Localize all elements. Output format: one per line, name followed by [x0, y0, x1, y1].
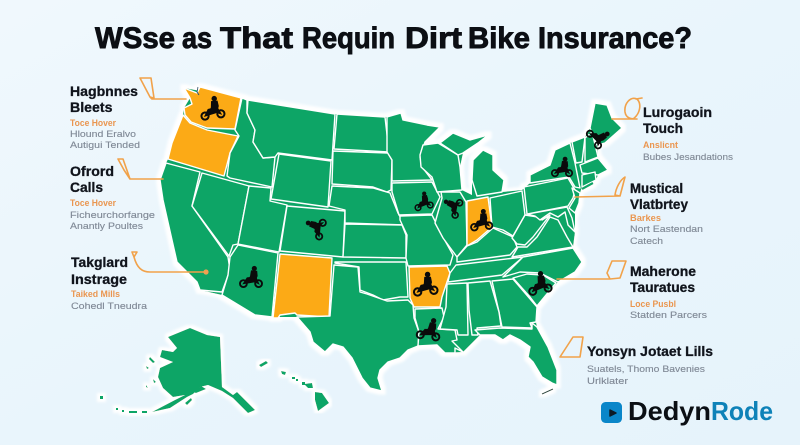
- state: Michigan upper: [440, 133, 488, 155]
- subheading: Loce Pusbl: [630, 299, 676, 309]
- title: That: [220, 22, 293, 55]
- state: New York: [530, 143, 580, 188]
- body: Bubes Jesandations: [643, 152, 733, 163]
- arrow: Lurogaoin connector: [612, 98, 642, 119]
- arrow: Hagbnnes connector: [140, 78, 186, 99]
- state: Texas: [297, 265, 419, 391]
- subheading: Barkes: [630, 213, 661, 223]
- icon: bike New York: [552, 157, 572, 176]
- heading: Ofrord: [70, 163, 114, 179]
- state: Long Island: [582, 183, 593, 189]
- body: Nort Eastendan: [630, 224, 703, 235]
- state: Florida: [475, 323, 557, 385]
- body: Suatels, Thomo Bavenies: [587, 364, 705, 375]
- state: Maine: [590, 103, 622, 145]
- state: South Carolina: [513, 274, 556, 306]
- map: Alaska: [100, 328, 255, 413]
- heading: Touch: [643, 120, 683, 136]
- state: Kansas: [343, 224, 406, 258]
- state: Washington: [184, 87, 241, 129]
- callout: Mustical Vlatbrtey: [630, 180, 703, 247]
- body: Cohedl Tneudra: [71, 301, 148, 312]
- land silhouette: [160, 88, 622, 391]
- Puget Sound: [197, 87, 199, 95]
- body: Ficheurchorfange: [70, 210, 155, 221]
- heading: Bleets: [70, 99, 113, 115]
- state: Wyoming: [271, 154, 331, 207]
- state: Oregon: [168, 115, 238, 176]
- heading: Tauratues: [630, 279, 695, 295]
- state: Utah: [238, 186, 287, 252]
- marker: Takglard dot: [203, 269, 209, 275]
- state: Maryland and Delaware: [527, 207, 575, 232]
- state: Missouri: [400, 215, 453, 266]
- title: [95, 22, 692, 55]
- heading: Maherone: [630, 263, 696, 279]
- heading: Takglard: [71, 254, 128, 270]
- arrow: Takglard connector: [132, 252, 206, 272]
- state: Ohio: [490, 191, 525, 236]
- state: Idaho: [227, 98, 275, 187]
- state: Michigan lower: [472, 150, 504, 196]
- icon: bike Illinois: [440, 195, 463, 219]
- state: California: [160, 163, 230, 292]
- state: Oklahoma: [335, 262, 408, 300]
- state: South Dakota: [332, 151, 392, 192]
- heading: Yonsyn Jotaet Lills: [587, 343, 713, 359]
- arrow: Yonsyn connector: [560, 337, 583, 357]
- callout: Lurogaoin Touch: [643, 104, 733, 163]
- state: Wisconsin: [420, 143, 462, 192]
- arrow: Ofrord connector: [118, 159, 163, 179]
- title: Insurance?: [538, 22, 692, 55]
- state: Iowa: [392, 182, 440, 215]
- title: as: [182, 22, 212, 55]
- state: Tennessee: [448, 257, 523, 282]
- body: Autigui Tended: [70, 140, 140, 151]
- heading: Hagbnnes: [70, 83, 138, 99]
- subheading: Taiked Mills: [71, 289, 120, 299]
- state: Florida Keys: [542, 389, 553, 394]
- logo wordmark: Dedyn: [628, 396, 711, 426]
- heading: Vlatbrtey: [630, 196, 688, 212]
- state: Mississippi: [440, 283, 468, 335]
- logo icon: [601, 402, 622, 423]
- callout: Maherone Tauratues: [630, 263, 707, 321]
- state: North Dakota: [334, 114, 389, 152]
- icon: bike Indiana: [469, 208, 493, 231]
- state: Colorado: [280, 206, 345, 257]
- state: Pennsylvania: [524, 178, 575, 214]
- callout: Yonsyn Jotaet Lills: [587, 343, 713, 387]
- body: Hlound Eralvo: [70, 129, 136, 140]
- state: Alabama: [468, 281, 501, 335]
- map: Hawaii: [259, 361, 329, 411]
- heading: Calls: [70, 179, 103, 195]
- title: Requin: [302, 22, 395, 55]
- icon: bike Arizona: [240, 266, 262, 287]
- subheading: Anslicnt: [643, 140, 678, 150]
- arrow: Mustical connector: [575, 177, 625, 197]
- body: Anantly Poultes: [70, 221, 143, 232]
- state: West Virginia: [512, 215, 550, 245]
- heading: Lurogaoin: [643, 104, 712, 120]
- icon: bike Maine: [586, 122, 613, 150]
- subheading: Toce Hover: [70, 198, 116, 208]
- icon: bike Louisiana: [416, 316, 442, 341]
- state: Kentucky: [457, 228, 517, 262]
- Alaska mainland: [152, 328, 255, 413]
- state: New Hampshire: [585, 132, 598, 162]
- state: Indiana: [467, 197, 492, 246]
- title: Bike: [468, 22, 530, 55]
- map: contiguous United States: [160, 87, 622, 394]
- body: Statden Parcers: [630, 310, 707, 321]
- logo: [601, 396, 773, 426]
- logo wordmark accent: Rode: [711, 396, 773, 426]
- state: North Carolina: [503, 248, 582, 282]
- icon: bike Arkansas: [412, 271, 438, 296]
- Hawaiian islands: [259, 361, 329, 411]
- body: Urlklater: [587, 376, 629, 387]
- icon: bike Colorado: [302, 215, 327, 240]
- title: Dirt: [405, 22, 462, 55]
- state: Connecticut and Rhode Island: [582, 172, 596, 187]
- state: Montana: [247, 100, 335, 160]
- state: Arkansas: [409, 266, 450, 307]
- state: New Jersey: [569, 188, 580, 213]
- state: Nebraska: [329, 186, 405, 225]
- Aleutian and nearby islands: [100, 357, 206, 413]
- state: Vermont: [572, 137, 585, 163]
- state: Minnesota: [387, 113, 440, 181]
- state: Arizona: [222, 245, 278, 317]
- state: Illinois: [435, 192, 467, 257]
- icon: bike Washington: [199, 95, 225, 120]
- callout: Ofrord Calls: [70, 163, 155, 232]
- title: WSse: [95, 22, 175, 55]
- state: Nevada: [192, 173, 249, 256]
- state: Massachusetts: [580, 158, 608, 175]
- state: New Mexico: [273, 254, 332, 318]
- heading: Mustical: [630, 180, 683, 196]
- callout: Takglard Instrage: [71, 254, 148, 312]
- heading: Instrage: [71, 271, 127, 287]
- icon: bike Iowa: [412, 190, 434, 211]
- body: Catech: [630, 236, 663, 247]
- state: Virginia: [512, 217, 573, 257]
- state: Louisiana: [415, 308, 463, 353]
- subheading: Toce Hover: [70, 118, 116, 128]
- state: Georgia: [492, 279, 537, 328]
- arrow: Maherone connector: [557, 261, 626, 279]
- icon: bike South Carolina: [525, 269, 552, 296]
- callout: Hagbnnes Bleets: [70, 83, 140, 151]
